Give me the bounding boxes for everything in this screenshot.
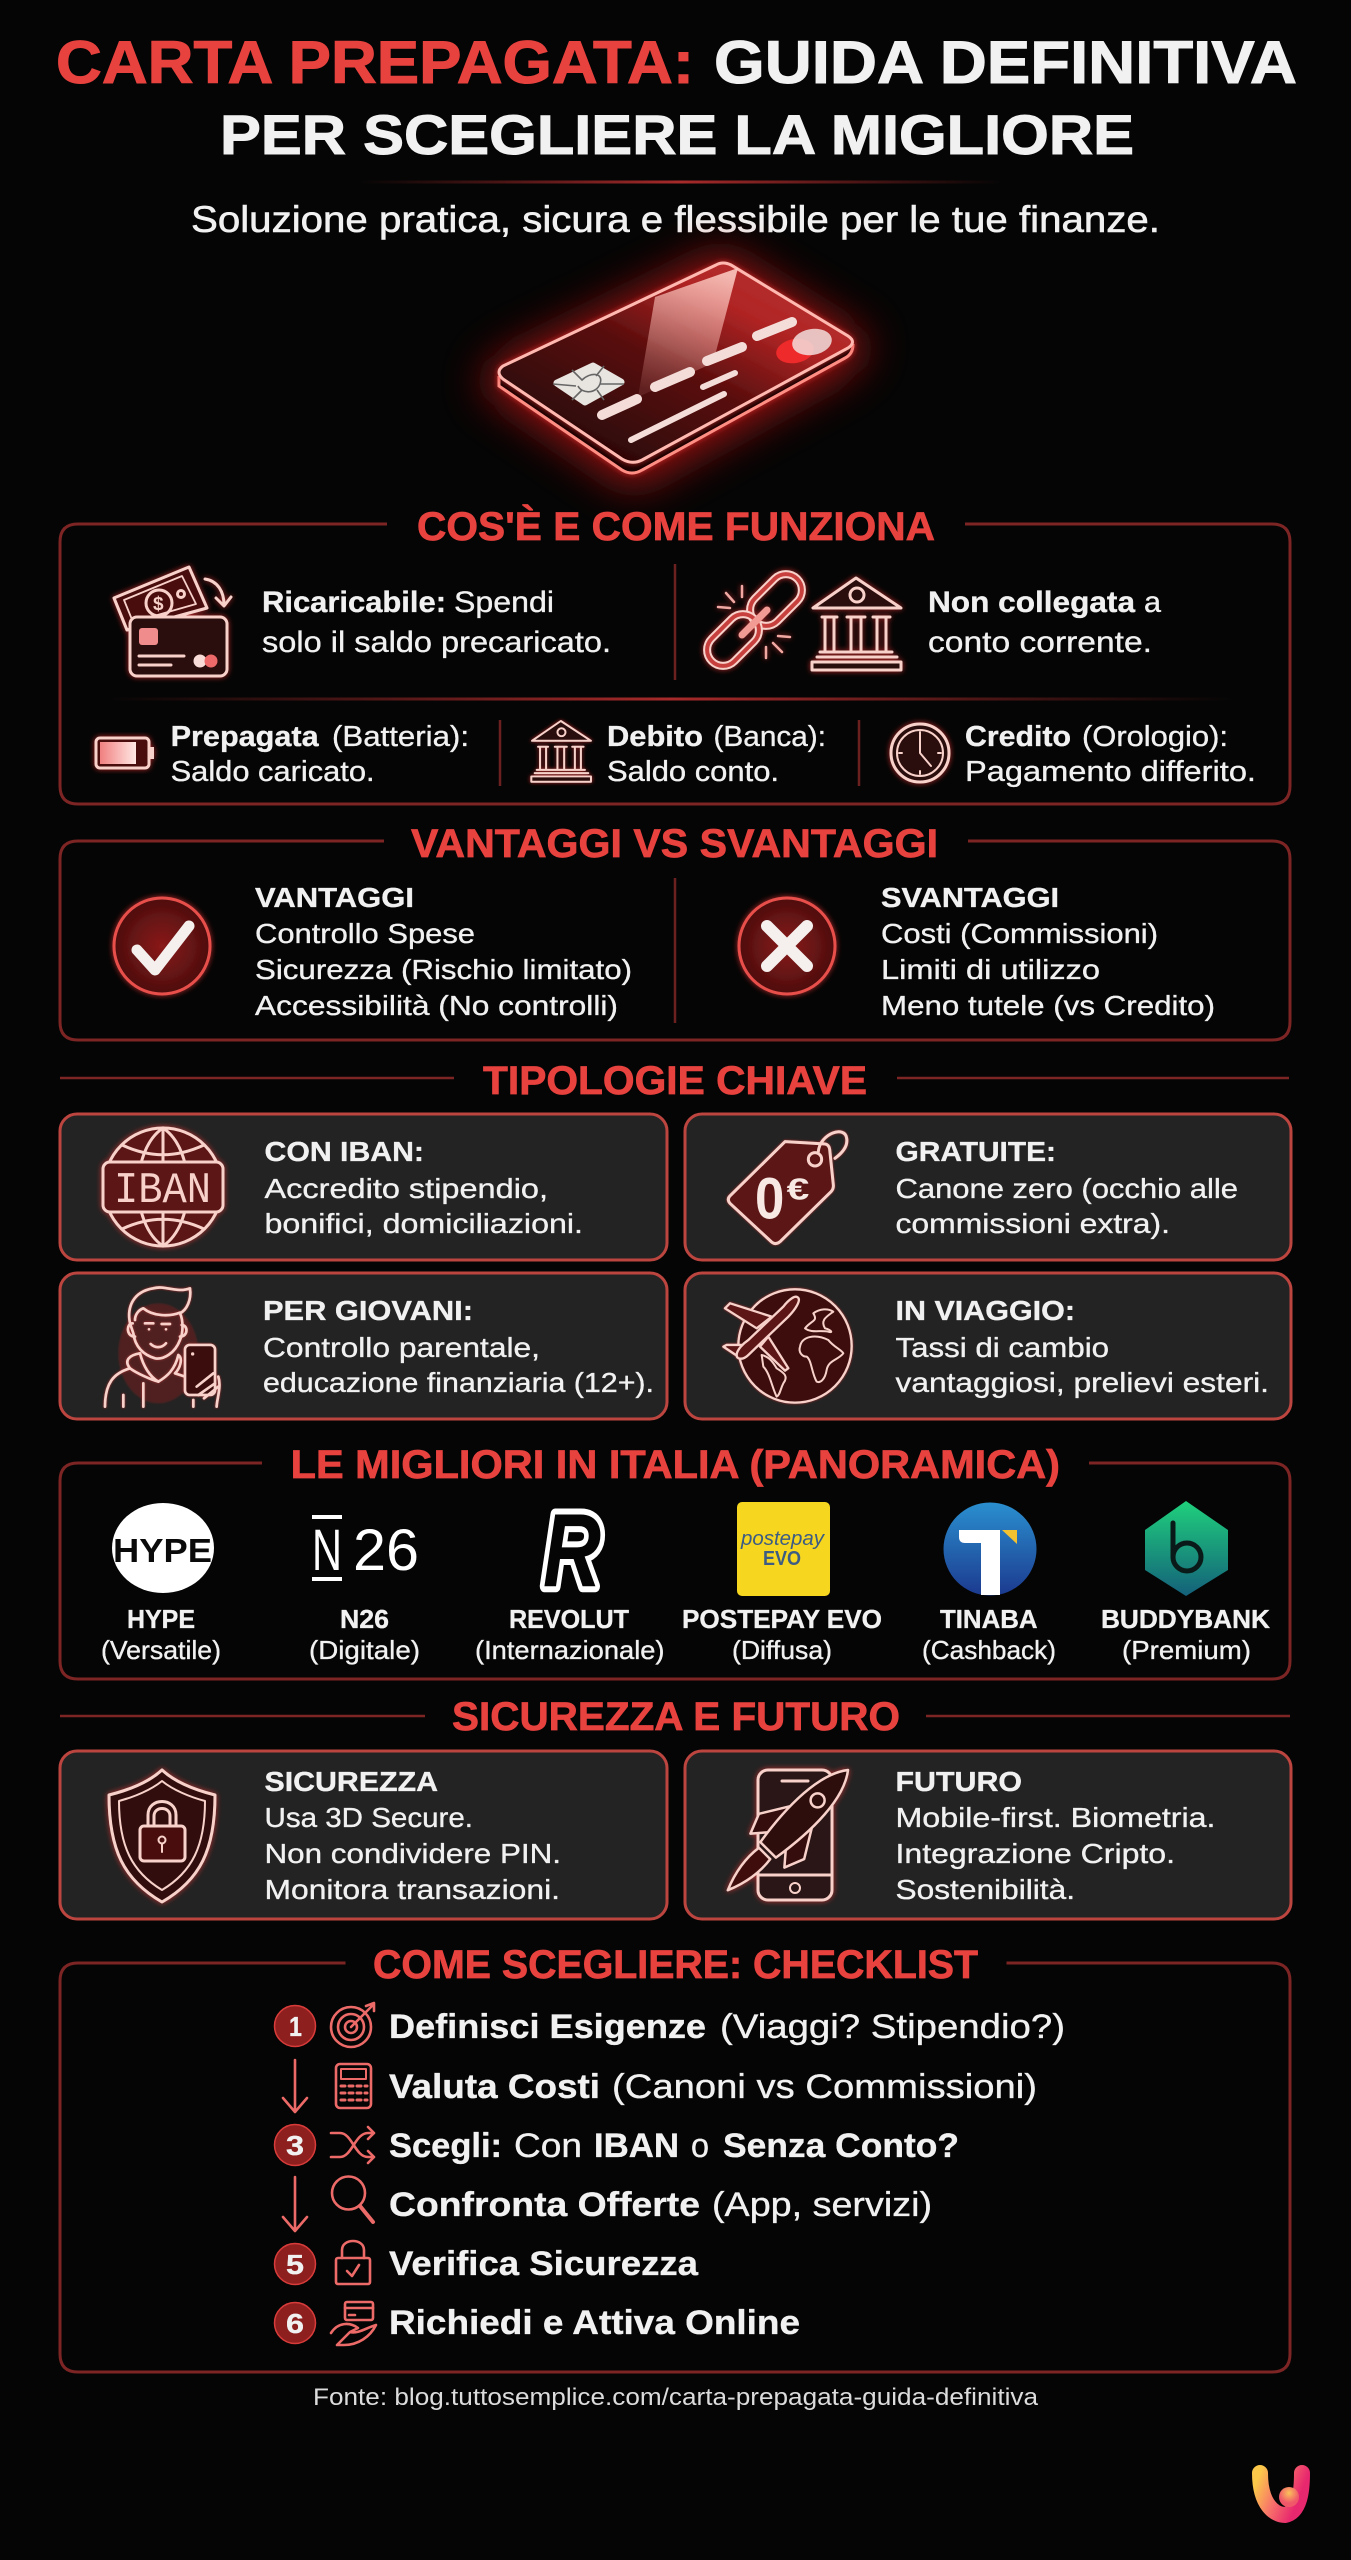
heading: vantaggi vs svantaggi: VANTAGGI VS SVANTAGGI — [411, 822, 938, 866]
title: GUIDA DEFINITIVA — [714, 29, 1297, 96]
label: tinaba — [922, 1604, 1056, 1665]
label: n26: N26 — [340, 1604, 389, 1634]
label: hype: (Versatile) — [101, 1635, 221, 1665]
text: per giovani: educazione finanziaria (12+). — [263, 1367, 654, 1398]
text: futuro: Sostenibilità. — [896, 1874, 1075, 1905]
source line: Fonte: blog.tuttosemplice.com/carta-prepagata-guida-definitiva — [313, 2384, 1039, 2411]
step 2: Valuta Costi — [389, 2068, 600, 2106]
text: per giovani: Controllo parentale, — [263, 1332, 540, 1363]
label: n26: (Digitale) — [309, 1635, 420, 1665]
text: in viaggio — [896, 1295, 1269, 1398]
step 1: Definisci Esigenze — [389, 2008, 706, 2046]
text: ricaricabile: Ricaricabile: — [262, 586, 446, 619]
text: sicurezza: SICUREZZA — [264, 1766, 438, 1797]
step 5: Verifica Sicurezza — [389, 2245, 699, 2283]
step 3: o — [691, 2127, 709, 2165]
card: in viaggio — [685, 1273, 1291, 1419]
text: sicurezza: Non condividere PIN. — [264, 1838, 561, 1869]
logo: hype: HYPE — [113, 1532, 212, 1569]
card: sicurezza — [60, 1751, 667, 1919]
text: debito: Debito — [607, 721, 703, 753]
arrow: step 3 to 5 — [283, 2177, 307, 2231]
text: svantaggi: SVANTAGGI — [881, 882, 1059, 913]
logo: postepay evo — [737, 1502, 830, 1596]
icon: iban globe: IBAN — [114, 1166, 211, 1216]
icon: glowing credit card — [480, 250, 870, 490]
text: svantaggi — [881, 882, 1215, 1021]
heading: le migliori in italia: LE MIGLIORI IN ITALIA (PANORAMICA) — [291, 1443, 1060, 1487]
label: tinaba: (Cashback) — [922, 1635, 1056, 1665]
icon: bank — [812, 578, 901, 670]
text: prepagata — [171, 721, 469, 788]
text: vantaggi: VANTAGGI — [255, 882, 414, 913]
text: in viaggio: Tassi di cambio — [896, 1332, 1109, 1363]
text: futuro: Integrazione Cripto. — [896, 1838, 1175, 1869]
step 3: IBAN — [594, 2127, 679, 2165]
text: con iban: bonifici, domiciliazioni. — [264, 1208, 583, 1239]
text: in viaggio: vantaggiosi, prelievi esteri. — [896, 1367, 1269, 1398]
text: per giovani: PER GIOVANI: — [263, 1295, 473, 1326]
icon: price tag: 0 — [755, 1166, 784, 1231]
logo: postepay evo: EVO — [763, 1548, 801, 1570]
text: non collegata: conto corrente. — [928, 626, 1152, 659]
text: con iban: Accredito stipendio, — [264, 1173, 548, 1204]
icon: price tag: € — [787, 1172, 809, 1206]
card: futuro — [685, 1747, 1291, 1919]
step 3: Senza Conto? — [723, 2127, 959, 2165]
title: CARTA PREPAGATA: — [56, 29, 694, 96]
step 3: Con — [514, 2127, 582, 2165]
text: credito: (Orologio): — [1082, 721, 1228, 753]
label: hype — [101, 1604, 221, 1665]
step 5 — [274, 2241, 699, 2284]
icon: battery — [96, 738, 154, 768]
text: debito — [607, 721, 826, 788]
heading: cos'è e come funziona: COS'È E COME FUNZIONA — [417, 504, 935, 549]
text: gratuite — [896, 1136, 1238, 1239]
icon: iban globe — [103, 1128, 223, 1246]
logo: hype — [112, 1503, 214, 1593]
text: gratuite: commissioni extra). — [896, 1208, 1170, 1239]
text: debito: Saldo conto. — [607, 756, 779, 788]
text: ricaricabile: solo il saldo precaricato. — [262, 626, 611, 659]
label: tinaba: TINABA — [940, 1604, 1038, 1634]
label: revolut: REVOLUT — [509, 1604, 629, 1634]
icon: phone and rocket — [705, 1747, 871, 1913]
step 6: Richiedi e Attiva Online — [389, 2304, 800, 2342]
icon: clock — [891, 724, 949, 782]
step 6 — [274, 2302, 800, 2345]
title: PER SCEGLIERE LA MIGLIORE — [220, 103, 1134, 166]
step 4: Confronta Offerte — [389, 2186, 700, 2224]
icon: check — [114, 898, 210, 994]
text: non collegata: Non collegata — [928, 586, 1135, 619]
text: prepagata: Saldo caricato. — [171, 756, 375, 788]
text: svantaggi: Meno tutele (vs Credito) — [881, 990, 1215, 1021]
step 6: 6 — [286, 2308, 304, 2339]
step 4: (App, servizi) — [712, 2186, 932, 2224]
card: con iban — [60, 1114, 667, 1260]
icon: price tag — [728, 1132, 847, 1244]
icon: banknote and card: $ — [153, 594, 164, 615]
text: credito: Credito — [965, 721, 1071, 753]
label: buddybank — [1101, 1604, 1270, 1665]
label: buddybank: BUDDYBANK — [1101, 1604, 1270, 1634]
step 2: (Canoni vs Commissioni) — [612, 2068, 1037, 2106]
text: ricaricabile: Spendi — [454, 586, 554, 619]
text: futuro: FUTURO — [896, 1766, 1022, 1797]
text: sicurezza: Usa 3D Secure. — [264, 1802, 473, 1833]
icon: shield with lock — [109, 1770, 215, 1902]
logo: n26: N — [312, 1518, 342, 1583]
text: non collegata: a — [1144, 586, 1161, 619]
step 2 — [336, 2064, 1037, 2108]
text: svantaggi: Limiti di utilizzo — [881, 954, 1100, 985]
icon: cross — [739, 898, 835, 994]
logo: tuttosemplice — [1260, 2473, 1302, 2515]
step 4 — [332, 2176, 932, 2224]
panel: checklist — [60, 1943, 1290, 2372]
logo: n26: 26 — [353, 1518, 419, 1583]
text: con iban — [264, 1136, 583, 1239]
step 1 — [274, 2003, 1065, 2047]
text: non collegata — [928, 586, 1161, 659]
panel: cos'è e come funziona — [60, 504, 1290, 804]
heading: come scegliere checklist: COME SCEGLIERE: CHECKLIST — [373, 1943, 978, 1987]
text: prepagata: Prepagata — [171, 721, 320, 753]
label: hype: HYPE — [127, 1604, 195, 1634]
text: in viaggio: IN VIAGGIO: — [896, 1295, 1075, 1326]
text: con iban: CON IBAN: — [264, 1136, 424, 1167]
text: vantaggi: Accessibilità (No controlli) — [255, 990, 618, 1021]
text: ricaricabile — [262, 586, 611, 659]
icon: broken chain — [700, 567, 809, 673]
step 5: 5 — [286, 2249, 304, 2280]
label: postepay evo — [682, 1604, 882, 1665]
step 3: 3 — [286, 2130, 304, 2161]
icon: plane and globe — [723, 1289, 852, 1403]
label: revolut: (Internazionale) — [475, 1635, 664, 1665]
label: n26 — [309, 1604, 420, 1665]
label: postepay evo: (Diffusa) — [732, 1635, 832, 1665]
text: per giovani — [263, 1295, 654, 1398]
logo: postepay evo: postepay — [740, 1528, 825, 1550]
text: vantaggi — [255, 882, 632, 1021]
text: prepagata: (Batteria): — [332, 721, 469, 753]
step 3: Scegli: — [389, 2127, 502, 2165]
logo: buddybank — [1145, 1501, 1228, 1596]
text: credito — [965, 721, 1256, 788]
text: gratuite: Canone zero (occhio alle — [896, 1173, 1238, 1204]
icon: banknote and card — [114, 567, 231, 676]
label: revolut — [475, 1604, 664, 1665]
step 1: (Viaggi? Stipendio?) — [720, 2008, 1065, 2046]
label: buddybank: (Premium) — [1122, 1635, 1251, 1665]
logo: revolut: R — [543, 1493, 601, 1609]
text: vantaggi: Sicurezza (Rischio limitato) — [255, 954, 632, 985]
subtitle: Soluzione pratica, sicura e flessibile per le tue finanze. — [191, 199, 1160, 240]
text: vantaggi: Controllo Spese — [255, 918, 475, 949]
text: futuro: Mobile-first. Biometria. — [896, 1802, 1216, 1833]
panel: vantaggi vs svantaggi — [60, 822, 1290, 1040]
panel: le migliori in italia — [60, 1443, 1290, 1679]
step 3 — [274, 2124, 959, 2166]
icon: young person with phone — [105, 1288, 219, 1407]
text: svantaggi: Costi (Commissioni) — [881, 918, 1158, 949]
icon: small bank — [531, 721, 591, 782]
arrow: step 1 to 3 — [283, 2060, 307, 2112]
text: gratuite: GRATUITE: — [896, 1136, 1056, 1167]
text: sicurezza: Monitora transazioni. — [264, 1874, 560, 1905]
label: postepay evo: POSTEPAY EVO — [682, 1604, 882, 1634]
title — [56, 29, 1297, 166]
step 1: 1 — [289, 2011, 302, 2042]
text: futuro — [896, 1766, 1216, 1905]
logo: n26 — [312, 1515, 419, 1583]
card: per giovani — [60, 1273, 667, 1419]
text: sicurezza — [264, 1766, 561, 1905]
heading: tipologie chiave: TIPOLOGIE CHIAVE — [483, 1059, 867, 1103]
text: debito: (Banca): — [714, 721, 826, 753]
heading: sicurezza e futuro: SICUREZZA E FUTURO — [452, 1695, 900, 1739]
card: gratuite — [685, 1114, 1291, 1260]
logo: tinaba — [944, 1502, 1036, 1596]
text: credito: Pagamento differito. — [965, 756, 1256, 788]
